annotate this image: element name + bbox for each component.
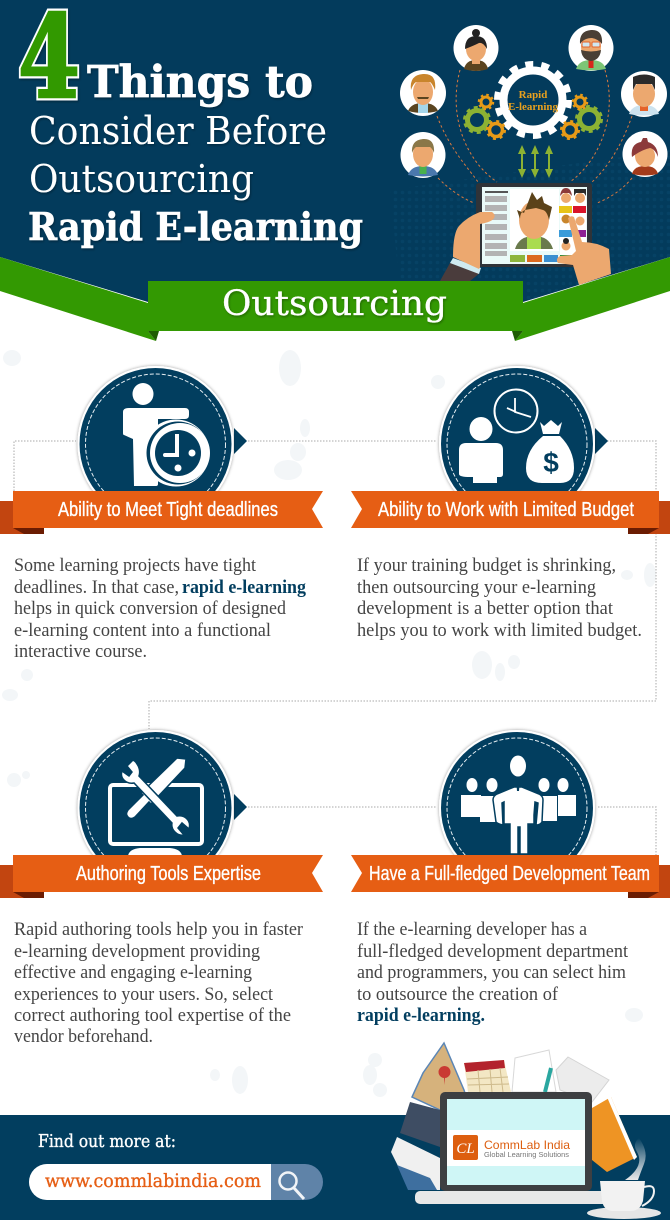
badge circle xyxy=(439,366,608,522)
body text: helps you to work with limited budget. xyxy=(357,621,642,641)
search box xyxy=(29,1164,323,1200)
ribbon heading: Authoring Tools Expertise xyxy=(76,862,261,885)
small gears xyxy=(464,95,602,139)
footer call to action xyxy=(29,1131,323,1200)
panel: limited budget xyxy=(351,366,670,641)
green banner xyxy=(0,257,670,341)
icon: person, clock and money bag xyxy=(459,390,574,483)
body text: interactive course. xyxy=(14,642,147,662)
body text: correct authoring tool expertise of the xyxy=(14,1006,291,1026)
body text: and programmers, you can select him xyxy=(357,963,627,983)
body text: deadlines. In that case, xyxy=(14,578,179,598)
person: left upper xyxy=(400,70,446,116)
footer bar xyxy=(0,1115,670,1220)
panel: tight deadlines xyxy=(0,366,323,662)
body text: If your training budget is shrinking, xyxy=(357,556,616,576)
coffee cup xyxy=(587,1138,661,1219)
title xyxy=(18,0,363,249)
body text xyxy=(14,920,303,1047)
body text: If the e-learning developer has a xyxy=(357,920,587,940)
body text: helps in quick conversion of designed xyxy=(14,599,287,619)
text column on tablet xyxy=(485,191,508,256)
papers xyxy=(391,1137,440,1190)
body text: e-learning content into a functional xyxy=(14,621,271,641)
large face on tablet xyxy=(515,192,553,249)
panel: development team xyxy=(351,730,670,1026)
thumbnails on tablet xyxy=(559,188,586,259)
tablet xyxy=(476,183,592,267)
body text: rapid e-learning xyxy=(182,578,307,598)
body text: rapid e-learning. xyxy=(357,1006,485,1026)
dark notebook xyxy=(400,1102,440,1147)
body text: to outsource the creation of xyxy=(357,985,559,1005)
central gear: Rapid E-learning xyxy=(497,64,569,136)
badge circle xyxy=(439,730,595,886)
calendar xyxy=(464,1060,511,1092)
body text xyxy=(357,556,642,641)
envelope xyxy=(556,1057,609,1102)
dotted connector path xyxy=(14,441,656,855)
central gear: Rapid E-learning: Rapid xyxy=(519,89,547,101)
icon: person, clock and money bag: $ xyxy=(543,447,559,478)
badge circle xyxy=(78,730,247,886)
icon: monitor with tools xyxy=(110,758,202,856)
logo text: CommLab India xyxy=(484,1138,570,1152)
person: right lower xyxy=(622,131,668,177)
right hand touching tablet xyxy=(557,216,611,285)
ribbon heading xyxy=(0,855,323,898)
pencil xyxy=(545,1068,551,1092)
colour tabs on tablet xyxy=(510,255,579,262)
laptop with CommLab India logo: Global Learning Solutions xyxy=(484,1152,570,1159)
body text: e-learning development providing xyxy=(14,942,260,962)
ribbon heading: Ability to Meet Tight deadlines xyxy=(58,498,278,521)
body text: full-fledged development department xyxy=(357,942,629,962)
title: Outsourcing xyxy=(29,157,254,201)
central gear: Rapid E-learning: E-learning xyxy=(508,101,558,113)
body text: vendor beforehand. xyxy=(14,1027,153,1047)
orange book xyxy=(592,1097,637,1172)
body text xyxy=(357,920,629,1026)
person: top left xyxy=(454,25,498,71)
panel: authoring tools xyxy=(0,730,323,1047)
green double arrows xyxy=(518,145,553,178)
header background xyxy=(0,0,670,331)
paper xyxy=(512,1050,556,1092)
map xyxy=(412,1043,470,1110)
title: Things to xyxy=(87,57,313,108)
search box: www.commlabindia.com xyxy=(45,1170,261,1192)
person: right upper xyxy=(621,71,667,117)
title: Consider Before xyxy=(29,109,327,153)
laptop with CommLab India logo xyxy=(415,1092,610,1204)
person: top right with glasses xyxy=(568,25,614,71)
body text: then outsourcing your e-learning xyxy=(357,578,596,598)
footer call to action: Find out more at: xyxy=(38,1131,176,1152)
body text xyxy=(14,556,307,662)
body text: experiences to your users. So, select xyxy=(14,985,274,1005)
icon: team of people xyxy=(461,756,576,854)
title: Rapid E-learning xyxy=(28,204,363,249)
person: left lower xyxy=(400,132,446,178)
ribbon heading xyxy=(351,855,670,898)
body text: development is a better option that xyxy=(357,599,614,619)
badge circle xyxy=(78,366,247,522)
dashed connector arcs xyxy=(437,70,632,203)
desk items behind laptop xyxy=(391,1043,637,1190)
body text: Some learning projects have tight xyxy=(14,556,257,576)
icon: magnifier xyxy=(280,1172,304,1199)
logo mark xyxy=(453,1135,478,1160)
banner heading: Outsourcing xyxy=(222,284,447,324)
icon: person with clock xyxy=(123,383,210,486)
ribbon heading xyxy=(351,491,670,534)
left hand holding tablet xyxy=(440,212,495,281)
body text: Rapid authoring tools help you in faster xyxy=(14,920,303,940)
laptop with CommLab India logo: CL xyxy=(456,1141,475,1157)
ribbon heading xyxy=(0,491,323,534)
body text: effective and engaging e-learning xyxy=(14,963,252,983)
